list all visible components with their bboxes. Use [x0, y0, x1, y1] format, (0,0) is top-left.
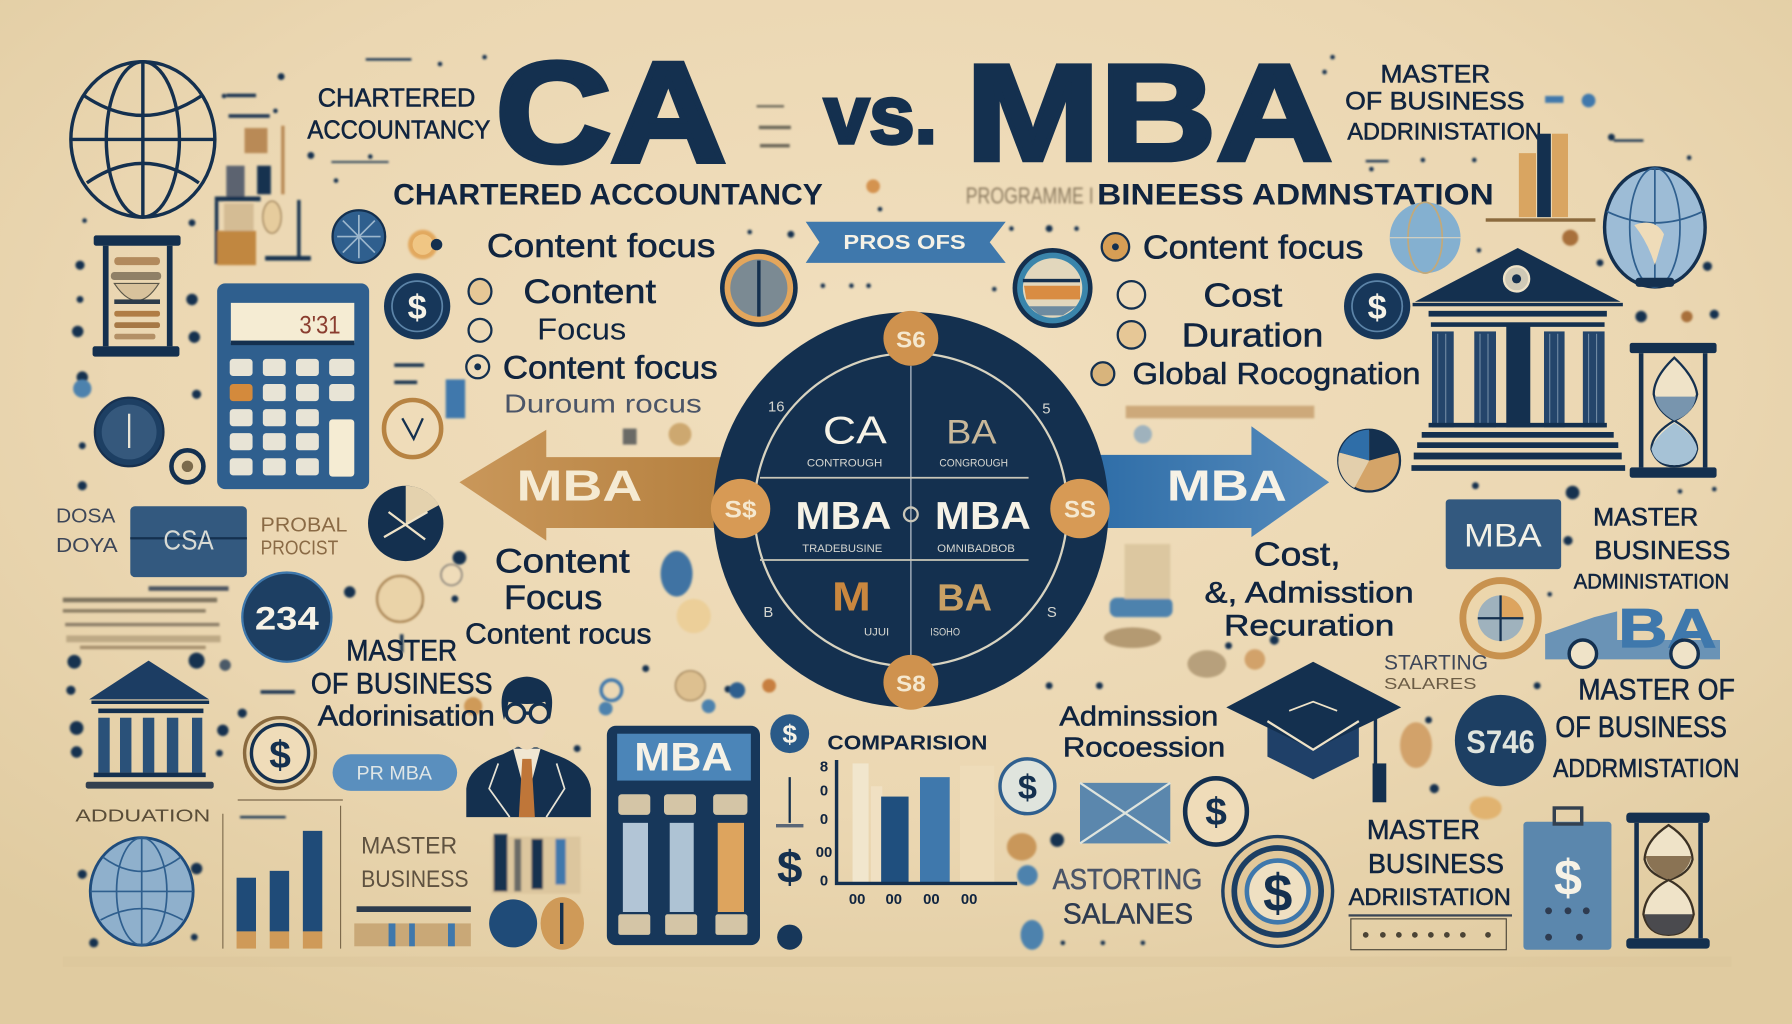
icon: clock medallion: [720, 249, 798, 327]
subheading: business administration: [966, 179, 1494, 212]
text: master business administration bottom: ADRIISTATION: [1349, 884, 1511, 911]
bar chart: comparison: 0: [820, 783, 828, 799]
left list: Content focus: [503, 349, 718, 385]
left list: Duroum rocus: [504, 389, 702, 419]
icon: classical building: [1411, 248, 1625, 471]
text: master business tan: MASTER: [361, 833, 457, 860]
bar chart bottom left: [223, 800, 343, 949]
small captions: CONGROUGH: [939, 457, 1008, 469]
label: global process: [261, 513, 347, 559]
icon: calculator: 3'31: [299, 312, 341, 340]
medallion bottom: [883, 655, 938, 710]
bar chart: comparison: 00: [961, 892, 977, 908]
left list: Content focus: [487, 228, 715, 265]
icon: clipboard: [1523, 808, 1611, 950]
small captions: 16: [768, 399, 785, 415]
text: master of business administration right lower: ADDRMISTATION: [1553, 753, 1739, 783]
left list: Focus: [537, 311, 626, 346]
icon: blue globe with stand: [1605, 168, 1705, 287]
mid left text: content focus: Focus: [504, 579, 602, 617]
text: cost admission recruitment: Cost,: [1254, 537, 1341, 574]
icon: dollar badge: $: [408, 289, 427, 327]
text: master business administration right: ADMINISTATION: [1574, 569, 1729, 594]
icon: dollar badge white: $: [1018, 769, 1037, 807]
heading: master of business administration top right: ADDRINISTATION: [1347, 118, 1542, 145]
pros and cons banner: [806, 222, 1006, 263]
pill label: [333, 754, 457, 791]
icon: dollar coin: $: [1205, 791, 1227, 834]
icon: dollar ring: $: [269, 734, 291, 777]
right list: Cost: [1203, 277, 1282, 314]
bar chart: comparison: 00: [816, 845, 832, 861]
medallion left: S$: [725, 497, 757, 524]
left labels: dosa doya: DOSA: [56, 504, 116, 527]
small captions: ISOHO: [930, 626, 960, 638]
label: adduation: ADDUATION: [75, 806, 210, 826]
label: comparision: COMPARISION: [827, 732, 987, 755]
text: cost admission recruitment: Recuration: [1224, 609, 1394, 642]
mid left text: content focus: Content rocus: [465, 618, 651, 650]
text: master business administration bottom: [1349, 814, 1511, 911]
quadrant: M: M: [832, 573, 871, 619]
text: starting salaries small: SALARES: [1384, 676, 1477, 693]
icon: pie chart right: [1338, 430, 1400, 491]
label: global process: PROCIST: [261, 536, 339, 559]
icon: dollar column: $: [782, 719, 797, 749]
small captions: TRADEBUSINE: [802, 543, 883, 555]
text: starting salaries: [1053, 864, 1202, 930]
text: admission process: Rocoession: [1063, 732, 1225, 763]
bar chart: comparison: 0: [820, 812, 828, 828]
right list: Duration: [1182, 317, 1323, 354]
text: master business administration right: BUSINESS: [1594, 535, 1730, 565]
text: master business tan: [361, 833, 469, 893]
left labels: dosa doya: DOYA: [56, 534, 118, 557]
text: master business administration right: MASTER: [1593, 504, 1698, 532]
medallion top: [883, 311, 938, 366]
title: vs.: [824, 70, 937, 161]
text: master of business administration right lower: MASTER OF: [1578, 673, 1735, 706]
bar chart: comparison: 8: [820, 759, 828, 775]
left list: [413, 228, 718, 419]
small captions: S: [1047, 605, 1057, 621]
heading: master of business administration top right: [1345, 60, 1542, 145]
MBA panel: MBA: [634, 735, 733, 779]
icon: light globe: [1390, 202, 1461, 273]
stripe block: [63, 586, 229, 649]
icon: dollar badge right: [1344, 273, 1410, 339]
icon: dollar badge: [384, 273, 450, 339]
text: master business administration bottom: MASTER: [1367, 814, 1480, 845]
icon: car with BA: [1545, 597, 1720, 667]
stripe chart: [354, 906, 471, 946]
text: starting salaries: ASTORTING: [1053, 864, 1202, 896]
icon: dollar badge white: [1000, 759, 1055, 814]
icon: salary badge: S746: [1466, 724, 1535, 760]
small captions: CONTROUGH: [807, 457, 882, 469]
icon: car with BA: BA: [1618, 597, 1717, 659]
right list: Global Rocognation: [1133, 356, 1421, 391]
icon: dollar badge right: $: [1368, 289, 1387, 327]
text: master of business administration right lower: OF BUSINESS: [1555, 711, 1727, 744]
icon: hourglass bottom right: [1626, 813, 1710, 949]
title: MBA: [966, 37, 1333, 190]
bar chart: comparison: 00: [885, 892, 902, 908]
text: master of business administration left: OF BUSINESS: [311, 668, 493, 701]
icon: MBA box: MBA: [1464, 517, 1542, 553]
icon: dollar column: $: [777, 841, 802, 892]
icon: small ring: [171, 450, 203, 482]
heading: master of business administration top right: OF BUSINESS: [1345, 88, 1525, 116]
quadrant: MBA right: MBA: [935, 495, 1031, 538]
heading: chartered accountancy small: CHARTERED: [318, 82, 475, 112]
MBA panel: [607, 726, 760, 945]
icon: calculator: [217, 283, 369, 489]
icon: concentric dollar: $: [1263, 864, 1292, 923]
subheading: chartered accountancy: CHARTERED ACCOUNTANCY: [393, 179, 823, 212]
heading: chartered accountancy small: ACCOUNTANCY: [307, 114, 490, 144]
icon: tan checked ring: [384, 400, 441, 457]
icon: clipboard: $: [1554, 849, 1582, 906]
subheading: business administration: PROGRAMME I: [966, 182, 1094, 208]
icon: CA briefcase: [130, 506, 247, 577]
icon: desk and lamp drawing: [215, 114, 311, 265]
text: master of business administration right lower: [1553, 673, 1739, 783]
icon: concentric dollar: [1223, 837, 1333, 946]
small captions: 5: [1042, 402, 1051, 418]
bar chart: comparison: 00: [849, 892, 865, 908]
heading: master of business administration top right: MASTER: [1381, 60, 1490, 88]
small captions: [763, 399, 1057, 638]
text: starting salaries: SALANES: [1063, 898, 1193, 930]
left labels: dosa doya: [56, 504, 118, 557]
icon: tan target: [1463, 581, 1538, 656]
icon: blue wheel: [333, 210, 385, 263]
heading: chartered accountancy small: [307, 82, 490, 144]
icon: CA briefcase: CSA: [163, 525, 214, 556]
right arrow: MBA: [1167, 463, 1287, 511]
medallion right: [1050, 479, 1110, 538]
medallion top: S6: [896, 326, 926, 352]
icon: number badge: 234: [255, 601, 319, 637]
icon: envelope: [1080, 783, 1170, 843]
dotted box: [1349, 914, 1512, 950]
text: starting salaries small: STARTING: [1384, 650, 1488, 675]
text: master of business administration left: MASTER: [346, 635, 457, 668]
central comparison circle: [713, 312, 1109, 707]
text: master of business administration left: Adorinisation: [318, 701, 495, 733]
pros and cons banner: PROS OFS: [843, 231, 966, 254]
left arrow: [459, 430, 731, 541]
text: master business tan: BUSINESS: [361, 866, 469, 893]
quadrant: MBA left: MBA: [795, 495, 891, 538]
bar chart: comparison: [816, 759, 1017, 908]
bar chart: comparison: 0: [820, 874, 828, 890]
medallion right: SS: [1064, 497, 1096, 524]
blurred stats block: [491, 834, 581, 894]
medallion left: [711, 479, 770, 538]
text: master business administration right: [1574, 504, 1730, 594]
label: global process: PROBAL: [261, 513, 347, 536]
icon: businessperson: [466, 677, 591, 817]
bottom stipple band: [63, 957, 1731, 967]
right arrow: [1097, 426, 1329, 537]
icon: number badge: [242, 573, 331, 662]
icon: salary badge: [1455, 695, 1546, 786]
quadrant: BA top: BA: [946, 413, 997, 451]
icon: dollar ring: [245, 718, 315, 789]
icon: landscape medallion: [1013, 248, 1093, 328]
small captions: B: [763, 605, 773, 621]
text: starting salaries small: [1384, 650, 1488, 693]
quadrant: BA bottom: BA: [937, 576, 992, 618]
icon: hourglass top right: [1630, 343, 1717, 478]
icon: framed scale: [93, 235, 181, 357]
small captions: OMNIBADBOB: [937, 543, 1015, 555]
icon: navy pie: [368, 486, 443, 561]
medallion bottom: S8: [896, 670, 926, 696]
icon: MBA box: [1446, 499, 1561, 569]
title: [496, 34, 1333, 192]
icon: classical building left: [86, 661, 214, 789]
text: master of business administration left: [311, 635, 495, 733]
icon: graduation cap: [1226, 662, 1401, 802]
text: admission process: Adminssion: [1059, 701, 1218, 732]
icon: dollar coin: [1185, 778, 1247, 845]
tan and blue specks: [73, 179, 1502, 950]
text: master business administration bottom: BUSINESS: [1368, 848, 1504, 879]
icon: compass badge left: [95, 398, 163, 466]
mid left text: content focus: [465, 543, 651, 650]
small bar chart top right: [1486, 134, 1595, 222]
text: cost admission recruitment: &, Admisstion: [1205, 576, 1414, 609]
icon: dollar column: [770, 714, 809, 950]
pill label: PR MBA: [357, 762, 432, 784]
title: CA: [496, 34, 726, 192]
bar chart: comparison: 00: [923, 892, 940, 908]
icon: paired circles: [489, 897, 584, 950]
icon: wireframe globe: [71, 62, 215, 217]
quadrant: CA: CA: [823, 409, 887, 452]
small captions: UJUI: [864, 626, 889, 638]
mid left text: content focus: Content: [495, 543, 630, 581]
right list: Content focus: [1143, 229, 1363, 266]
icon: blue globe bottom left: [90, 838, 193, 945]
left list: Content: [523, 273, 657, 311]
right list: [1091, 229, 1421, 391]
subheading: business administration: BINEESS ADMNSTATION: [1097, 179, 1494, 212]
left arrow: MBA: [517, 463, 642, 511]
text: admission process: [1059, 701, 1225, 763]
text: cost admission recruitment: [1205, 537, 1414, 642]
